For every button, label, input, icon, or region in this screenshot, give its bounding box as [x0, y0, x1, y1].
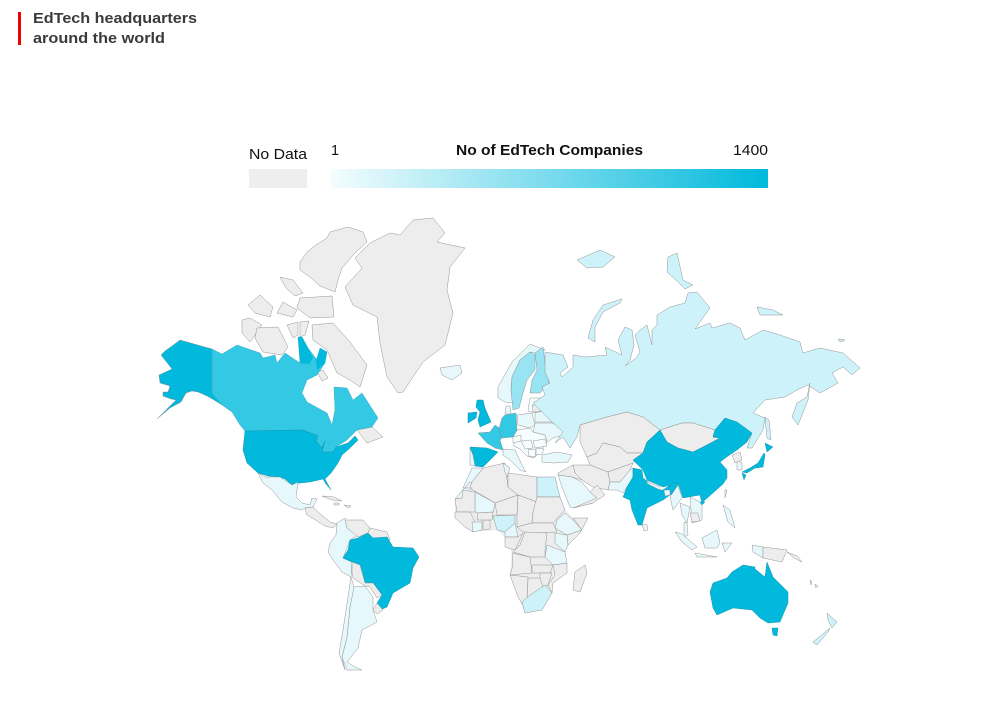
- Africa: [455, 463, 588, 613]
- legend: no data swatch: [249, 147, 308, 188]
- title: EdTech headquarters around the world: around the world: [33, 30, 165, 47]
- choropleth world map: [157, 218, 860, 670]
- legend: no data swatch: No Data: [249, 147, 308, 163]
- Europe: [468, 344, 572, 472]
- legend: colour scale for number of companies: 1400: [733, 143, 768, 159]
- Asia: [533, 250, 860, 562]
- legend: colour scale for number of companies: [331, 143, 768, 188]
- North America and Arctic: [157, 218, 465, 528]
- South America: [328, 518, 419, 670]
- Australia and Oceania: [710, 552, 837, 645]
- title: EdTech headquarters around the world: [18, 10, 197, 47]
- legend: colour scale for number of companies: No of EdTech Companies: [456, 143, 643, 159]
- title: EdTech headquarters around the world: EdTech headquarters: [33, 10, 197, 27]
- legend: colour scale for number of companies: 1: [331, 143, 339, 159]
